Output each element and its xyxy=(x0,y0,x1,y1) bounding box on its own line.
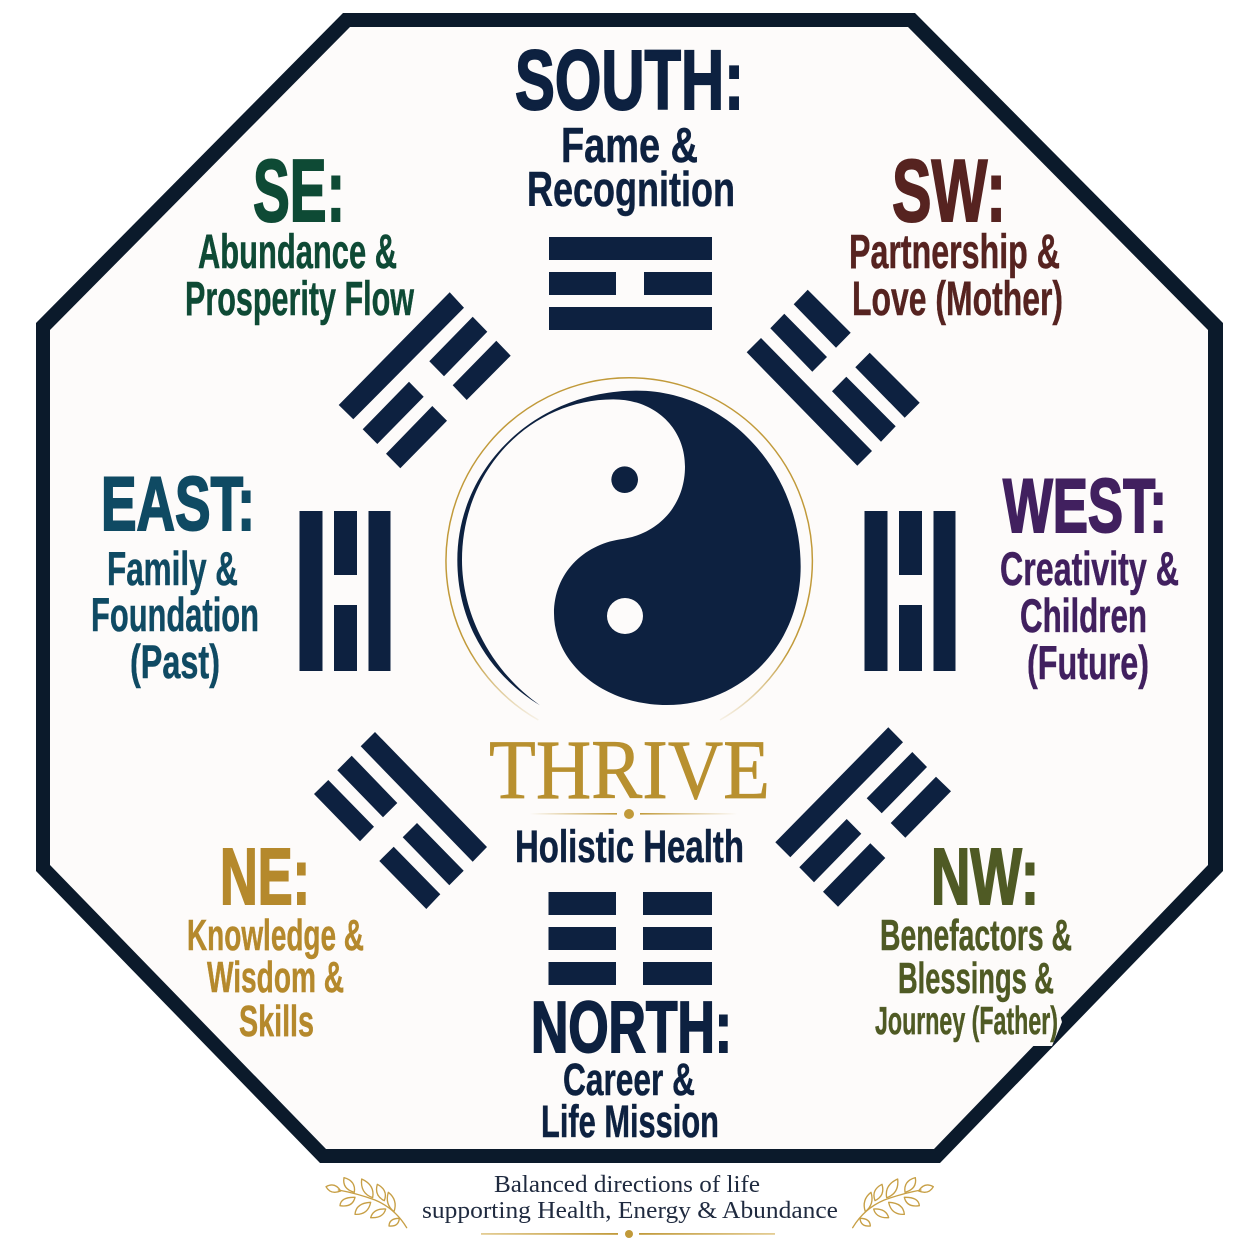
icon: left laurel sprig xyxy=(326,1178,407,1228)
trigram: East xyxy=(300,511,390,671)
yin yang symbol xyxy=(446,378,812,720)
heading: East: (Past) xyxy=(130,635,220,688)
footer tagline xyxy=(422,1171,838,1224)
heading: West: (Future) xyxy=(1027,636,1149,689)
heading: South: SOUTH: xyxy=(515,33,744,127)
heading: North: Career & xyxy=(563,1054,695,1105)
trigram: SE xyxy=(339,292,511,468)
heading: NW: Journey (Father) xyxy=(875,1000,1058,1043)
heading: West: Children xyxy=(1020,589,1147,642)
trigram: NE xyxy=(314,732,487,909)
heading: SE: SE: xyxy=(253,141,345,240)
footer tagline: Balanced directions of life xyxy=(494,1171,760,1198)
heading: NW: Benefactors & xyxy=(880,911,1072,960)
heading: East: EAST: xyxy=(101,462,255,547)
heading: SW: SW: xyxy=(892,141,1006,240)
heading: SE: Prosperity Flow xyxy=(185,273,414,326)
footer divider xyxy=(481,1230,775,1238)
trigram: South xyxy=(549,237,712,330)
heading: NW: Blessings & xyxy=(898,954,1054,1003)
heading: North xyxy=(531,988,732,1147)
heading: NE xyxy=(187,832,364,1046)
heading: West: WEST: xyxy=(1003,464,1167,549)
heading: SW: Partnership & xyxy=(849,226,1060,279)
icon: right laurel sprig xyxy=(853,1178,933,1228)
heading: SE xyxy=(185,141,414,326)
heading: North: Life Mission xyxy=(541,1096,719,1147)
heading: East xyxy=(91,462,259,688)
heading: SW: Love (Mother) xyxy=(852,273,1063,326)
heading: NW: NW: xyxy=(931,832,1039,921)
heading: NE: Wisdom & xyxy=(207,953,344,1002)
brand: THRIVE: THRIVE xyxy=(489,723,770,817)
trigram: West xyxy=(864,511,956,671)
heading: NE: Knowledge & xyxy=(187,911,364,960)
heading: NE: NE: xyxy=(220,832,310,921)
heading: SE: Abundance & xyxy=(198,226,397,279)
heading: East: Family & xyxy=(107,542,238,595)
heading: South: Fame & xyxy=(561,119,698,173)
heading: West: Creativity & xyxy=(1000,542,1179,595)
heading: West xyxy=(1000,464,1179,689)
subtitle: Holistic Health: Holistic Health xyxy=(515,821,744,872)
heading: NW xyxy=(875,832,1072,1043)
heading: North: NORTH: xyxy=(531,988,732,1068)
heading: South xyxy=(515,33,744,217)
trigram: North xyxy=(548,892,712,985)
heading: South: Recognition xyxy=(527,163,735,217)
heading: East: Foundation xyxy=(91,588,259,641)
trigram: SW xyxy=(747,290,920,466)
heading: NE: Skills xyxy=(239,997,314,1046)
footer tagline: supporting Health, Energy & Abundance xyxy=(422,1197,838,1224)
heading: SW xyxy=(849,141,1063,326)
trigram: NW xyxy=(775,727,951,907)
